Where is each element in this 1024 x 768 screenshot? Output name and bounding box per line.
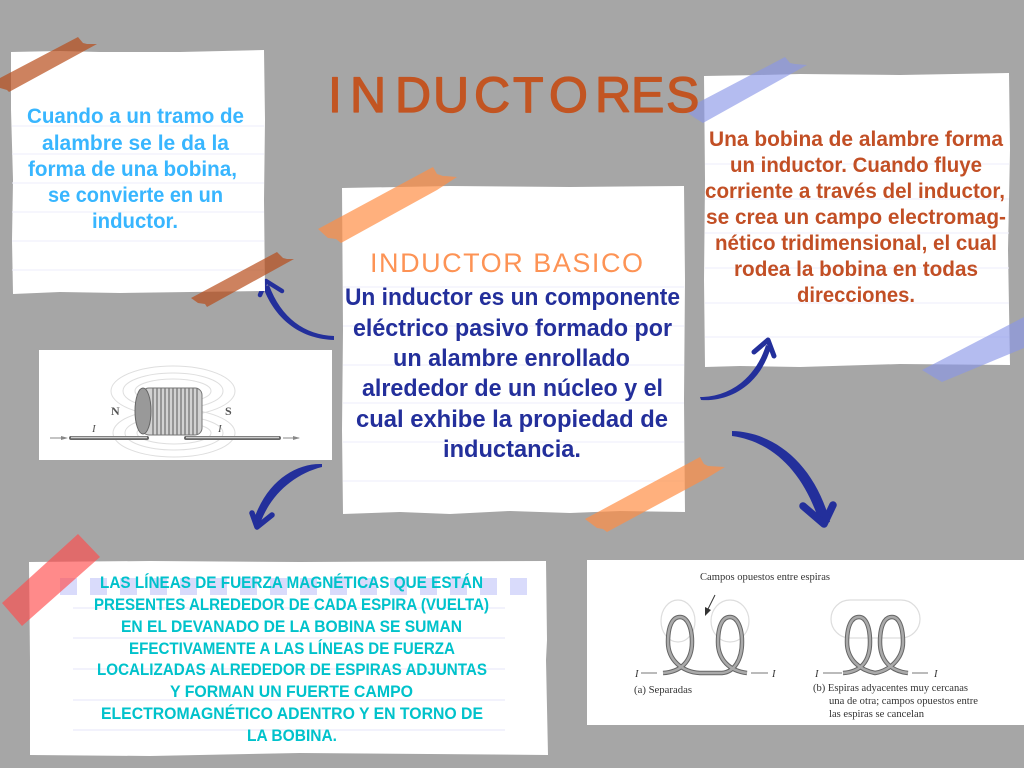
image: solenoid coil: S [225,404,232,418]
image: loop diagrams: las espiras se cancelan [829,709,925,720]
image: solenoid coil: I [91,423,97,435]
tape: central note lower [585,457,725,532]
panel: central note [342,186,685,514]
image: loop diagrams: I [814,669,819,680]
text: central note: inductancia. [443,436,581,463]
heading: inductor basico: INDUCTOR BASICO [370,248,643,278]
text: bottom-left note: Y FORMAN UN FUERTE CAMPO [170,683,413,701]
text: top-left note: se convierte en un [48,184,223,207]
image: loop diagrams: I [771,669,776,680]
text: top-left note: Cuando a un tramo de [27,105,244,128]
text: bottom-left note: LA BOBINA. [247,727,337,745]
text: top-right note: se crea un campo electromag- [706,206,1006,229]
text: top-right note: rodea la bobina en todas [734,258,978,281]
text: top-right note: corriente a través del inductor, [705,180,1005,203]
text: bottom-left note [94,573,489,745]
image: loop diagrams: I [634,669,639,680]
text: bottom-left note: EN EL DEVANADO DE LA BOBINA SE SUMAN [121,618,462,636]
text: bottom-left note: EFECTIVAMENTE A LAS LÍNEAS DE FUERZA [129,639,455,658]
arrow: to bottom-left note [252,464,322,527]
text: top-left note: alambre se le da la [42,132,229,155]
text: top-left note [27,105,244,233]
text: central note: Un inductor es un componente [345,284,680,311]
panel: top-left note [11,50,265,294]
tape: top-left note lower [191,252,294,307]
image: solenoid coil: I [217,423,223,435]
title: INDUCTORES [328,67,699,123]
text: top-right note [705,128,1006,307]
image: loop diagrams: Campos opuestos entre espiras [700,572,830,583]
text: central note: eléctrico pasivo formado por [353,315,672,342]
text: central note: alrededor de un núcleo y el [362,375,663,402]
text: central note: un alambre enrollado [393,345,630,372]
text: top-right note: un inductor. Cuando fluye [730,154,982,177]
text: bottom-left note: LAS LÍNEAS DE FUERZA MAGNÉTICAS QUE ESTÁN [100,573,483,592]
text: top-right note: direcciones. [797,284,915,307]
image: loop diagrams: I [933,669,938,680]
text: top-left note: inductor. [92,210,178,233]
image: loop diagrams: una de otra; campos opuestos entre [829,696,978,707]
tape: top-left note upper [0,37,97,92]
image: solenoid coil [39,350,332,460]
tape: top-right note upper [684,57,807,123]
image: loop diagrams: (a) Separadas [634,685,692,696]
image: loop diagrams: (b) Espiras adyacentes muy cercanas [813,683,968,694]
text: top-right note: Una bobina de alambre forma [709,128,1003,151]
tape: bottom-left note [2,534,100,626]
tape: central note upper [318,167,457,243]
text: central note [345,284,680,463]
text: central note: cual exhibe la propiedad de [356,406,668,433]
arrow: to loop diagrams [732,431,833,524]
image: solenoid coil: N [111,404,120,418]
panel: top-right note [704,73,1010,367]
arrow: to top-right note [700,340,774,400]
tape: top-right note lower [922,317,1024,382]
text: bottom-left note: PRESENTES ALREDEDOR DE CADA ESPIRA (VUELTA) [94,596,489,614]
text: bottom-left note: LOCALIZADAS ALREDEDOR DE ESPIRAS ADJUNTAS [97,661,487,679]
text: bottom-left note: ELECTROMAGNÉTICO ADENTRO Y EN TORNO DE [101,704,483,723]
text: top-left note: forma de una bobina, [28,158,237,181]
decoration: dashed band [60,578,528,595]
text: top-right note: nético tridimensional, el cual [715,232,997,255]
image: loop diagrams [587,560,1024,725]
arrow: to top-left note [260,281,334,340]
panel: bottom-left note [29,561,548,756]
